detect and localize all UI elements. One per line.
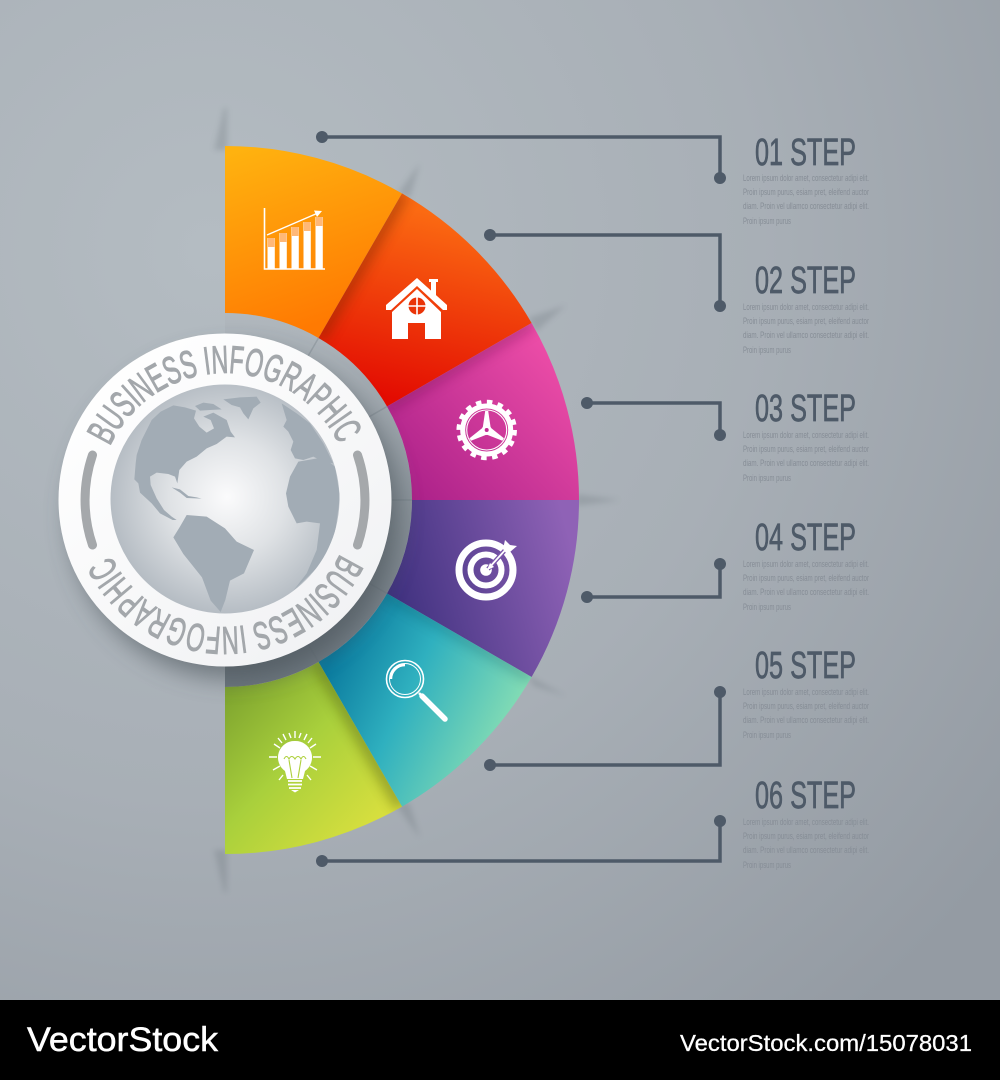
step 1 text: 01 STEP (755, 132, 856, 174)
connector 4 (581, 558, 726, 603)
step 3 text (743, 388, 869, 484)
step 4 text: Proin ipsum purus, esiam pret, eleifend auctor (743, 573, 869, 584)
step 2 text: diam. Proin vel ullamco consectetur adipi elit. (743, 330, 869, 341)
step 5 text: 05 STEP (755, 645, 856, 687)
footer logo: VectorStock (27, 1021, 219, 1059)
step 1 text (743, 132, 869, 227)
badge face (58, 334, 392, 666)
connector 3 (581, 397, 726, 441)
icon: bar chart (264, 208, 325, 269)
step 3 text: 03 STEP (755, 388, 856, 430)
panel: wedge 5 teal (318, 594, 532, 807)
step 6 text (743, 775, 869, 871)
step 6 text: Proin ipsum purus (743, 860, 791, 871)
step 6 text: 06 STEP (755, 775, 856, 817)
panel: grey hub ring (225, 313, 412, 687)
connector 1 (316, 131, 726, 184)
step 3 text: Proin ipsum purus (743, 473, 791, 484)
curved title top: BUSINESS INFOGRAPHIC (86, 346, 361, 445)
panel: wedge 3 magenta (387, 323, 579, 500)
icon: gear (460, 403, 514, 457)
icon: target (459, 540, 517, 597)
connector 5 (484, 686, 726, 771)
step 6 text: diam. Proin vel ullamco consectetur adipi elit. (743, 845, 869, 856)
step 4 text: diam. Proin vel ullamco consectetur adipi elit. (743, 587, 869, 598)
icon: magnifier (386, 660, 445, 719)
step 6 text: Proin ipsum purus, esiam pret, eleifend auctor (743, 831, 869, 842)
panel: wedge 1 orange (225, 146, 402, 338)
globe sphere (110, 384, 340, 614)
step 3 text: Lorem ipsum dolor amet, consectetur adipi elit. (743, 430, 869, 441)
step 4 text: 04 STEP (755, 517, 856, 559)
step 1 text: diam. Proin vel ullamco consectetur adipi elit. (743, 201, 869, 212)
connector 6 (316, 815, 726, 867)
icon: house (386, 278, 447, 339)
step 5 text: diam. Proin vel ullamco consectetur adipi elit. (743, 715, 869, 726)
panel: wedge 6 green (225, 662, 402, 854)
panel: wedge 2 red (318, 193, 532, 406)
step 5 text: Proin ipsum purus, esiam pret, eleifend auctor (743, 701, 869, 712)
step 2 text: Lorem ipsum dolor amet, consectetur adipi elit. (743, 302, 869, 313)
step 1 text: Lorem ipsum dolor amet, consectetur adipi elit. (743, 173, 869, 184)
step 4 text: Proin ipsum purus (743, 602, 791, 613)
step 6 text: Lorem ipsum dolor amet, consectetur adipi elit. (743, 817, 869, 828)
world map (134, 397, 340, 612)
side pill right (358, 455, 365, 545)
step 1 text: Proin ipsum purus (743, 216, 791, 227)
connector 2 (484, 229, 726, 312)
step 3 text: diam. Proin vel ullamco consectetur adipi elit. (743, 458, 869, 469)
curved title bottom: BUSINESS INFOGRAPHIC (89, 555, 364, 654)
hub drop shadow (69, 349, 399, 679)
step 2 text: Proin ipsum purus (743, 345, 791, 356)
step 2 text: Proin ipsum purus, esiam pret, eleifend auctor (743, 316, 869, 327)
footer bar (0, 1000, 1000, 1080)
wedge cast shadows (214, 108, 620, 892)
step 2 text: 02 STEP (755, 260, 856, 302)
step 1 text: Proin ipsum purus, esiam pret, eleifend auctor (743, 187, 869, 198)
panel: central badge (58, 334, 392, 666)
step 3 text: Proin ipsum purus, esiam pret, eleifend auctor (743, 444, 869, 455)
panel: wedge 4 purple (387, 500, 579, 677)
step 5 text (743, 645, 869, 741)
step 5 text: Proin ipsum purus (743, 730, 791, 741)
side pill left (85, 455, 92, 545)
step 2 text (743, 260, 869, 356)
step 4 text: Lorem ipsum dolor amet, consectetur adipi elit. (743, 559, 869, 570)
icon: light bulb (269, 731, 321, 792)
step 5 text: Lorem ipsum dolor amet, consectetur adipi elit. (743, 687, 869, 698)
footer url: VectorStock.com/15078031 (680, 1030, 972, 1056)
step 4 text (743, 517, 869, 613)
